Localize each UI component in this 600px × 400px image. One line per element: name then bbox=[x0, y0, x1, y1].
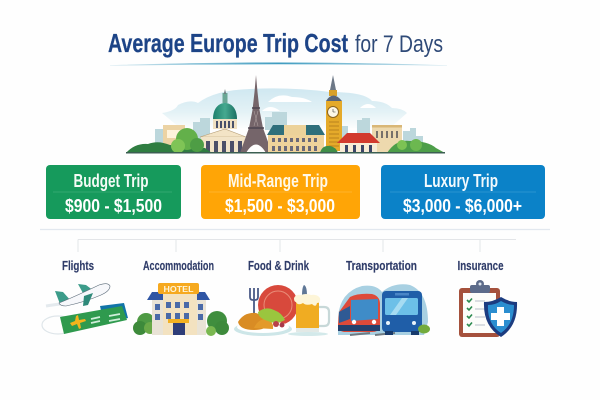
panel: Mid-Range Trip: $1,500 - $3,000 bbox=[225, 196, 335, 216]
distant city bbox=[155, 112, 423, 150]
title: for 7 Days bbox=[355, 31, 443, 58]
left building bbox=[163, 125, 185, 150]
domed building bbox=[200, 89, 246, 153]
label: Flights: Flights bbox=[62, 258, 94, 273]
panel: Luxury Trip: $3,000 - $6,000+ bbox=[403, 196, 522, 216]
right beige building bbox=[372, 125, 402, 152]
yellow palace bbox=[267, 125, 325, 153]
panel: Mid-Range Trip: Mid-Range Trip bbox=[228, 171, 328, 191]
label: Insurance: Insurance bbox=[458, 258, 504, 273]
panel: Luxury Trip: Luxury Trip bbox=[424, 171, 498, 191]
label: Transportation: Transportation bbox=[346, 258, 417, 273]
panel: Budget Trip: $900 - $1,500 bbox=[65, 196, 162, 216]
icon: train and bus bbox=[338, 284, 430, 335]
icon: insurance clipboard and shield bbox=[459, 280, 517, 337]
panel: Luxury Trip bbox=[381, 165, 545, 219]
icon: food and drink bbox=[234, 285, 329, 336]
red roof building bbox=[337, 133, 380, 153]
title: Average Europe Trip Cost bbox=[108, 28, 348, 58]
icon: hotel: HOTEL bbox=[164, 284, 194, 294]
Big Ben bbox=[326, 75, 342, 151]
Eiffel Tower bbox=[240, 75, 272, 153]
label: Accommodation: Accommodation bbox=[143, 258, 214, 273]
trees and ground bbox=[126, 128, 445, 154]
panel: Mid-Range Trip bbox=[201, 165, 360, 219]
illustration: European skyline bbox=[126, 75, 445, 154]
title underline bbox=[110, 63, 447, 66]
sky and clouds bbox=[162, 88, 407, 128]
panel: Budget Trip: Budget Trip bbox=[74, 171, 148, 191]
icon: airplane and tickets bbox=[42, 284, 128, 334]
panel: Budget Trip bbox=[46, 165, 181, 219]
label: Food & Drink: Food & Drink bbox=[248, 258, 310, 273]
icon: hotel bbox=[133, 283, 229, 336]
